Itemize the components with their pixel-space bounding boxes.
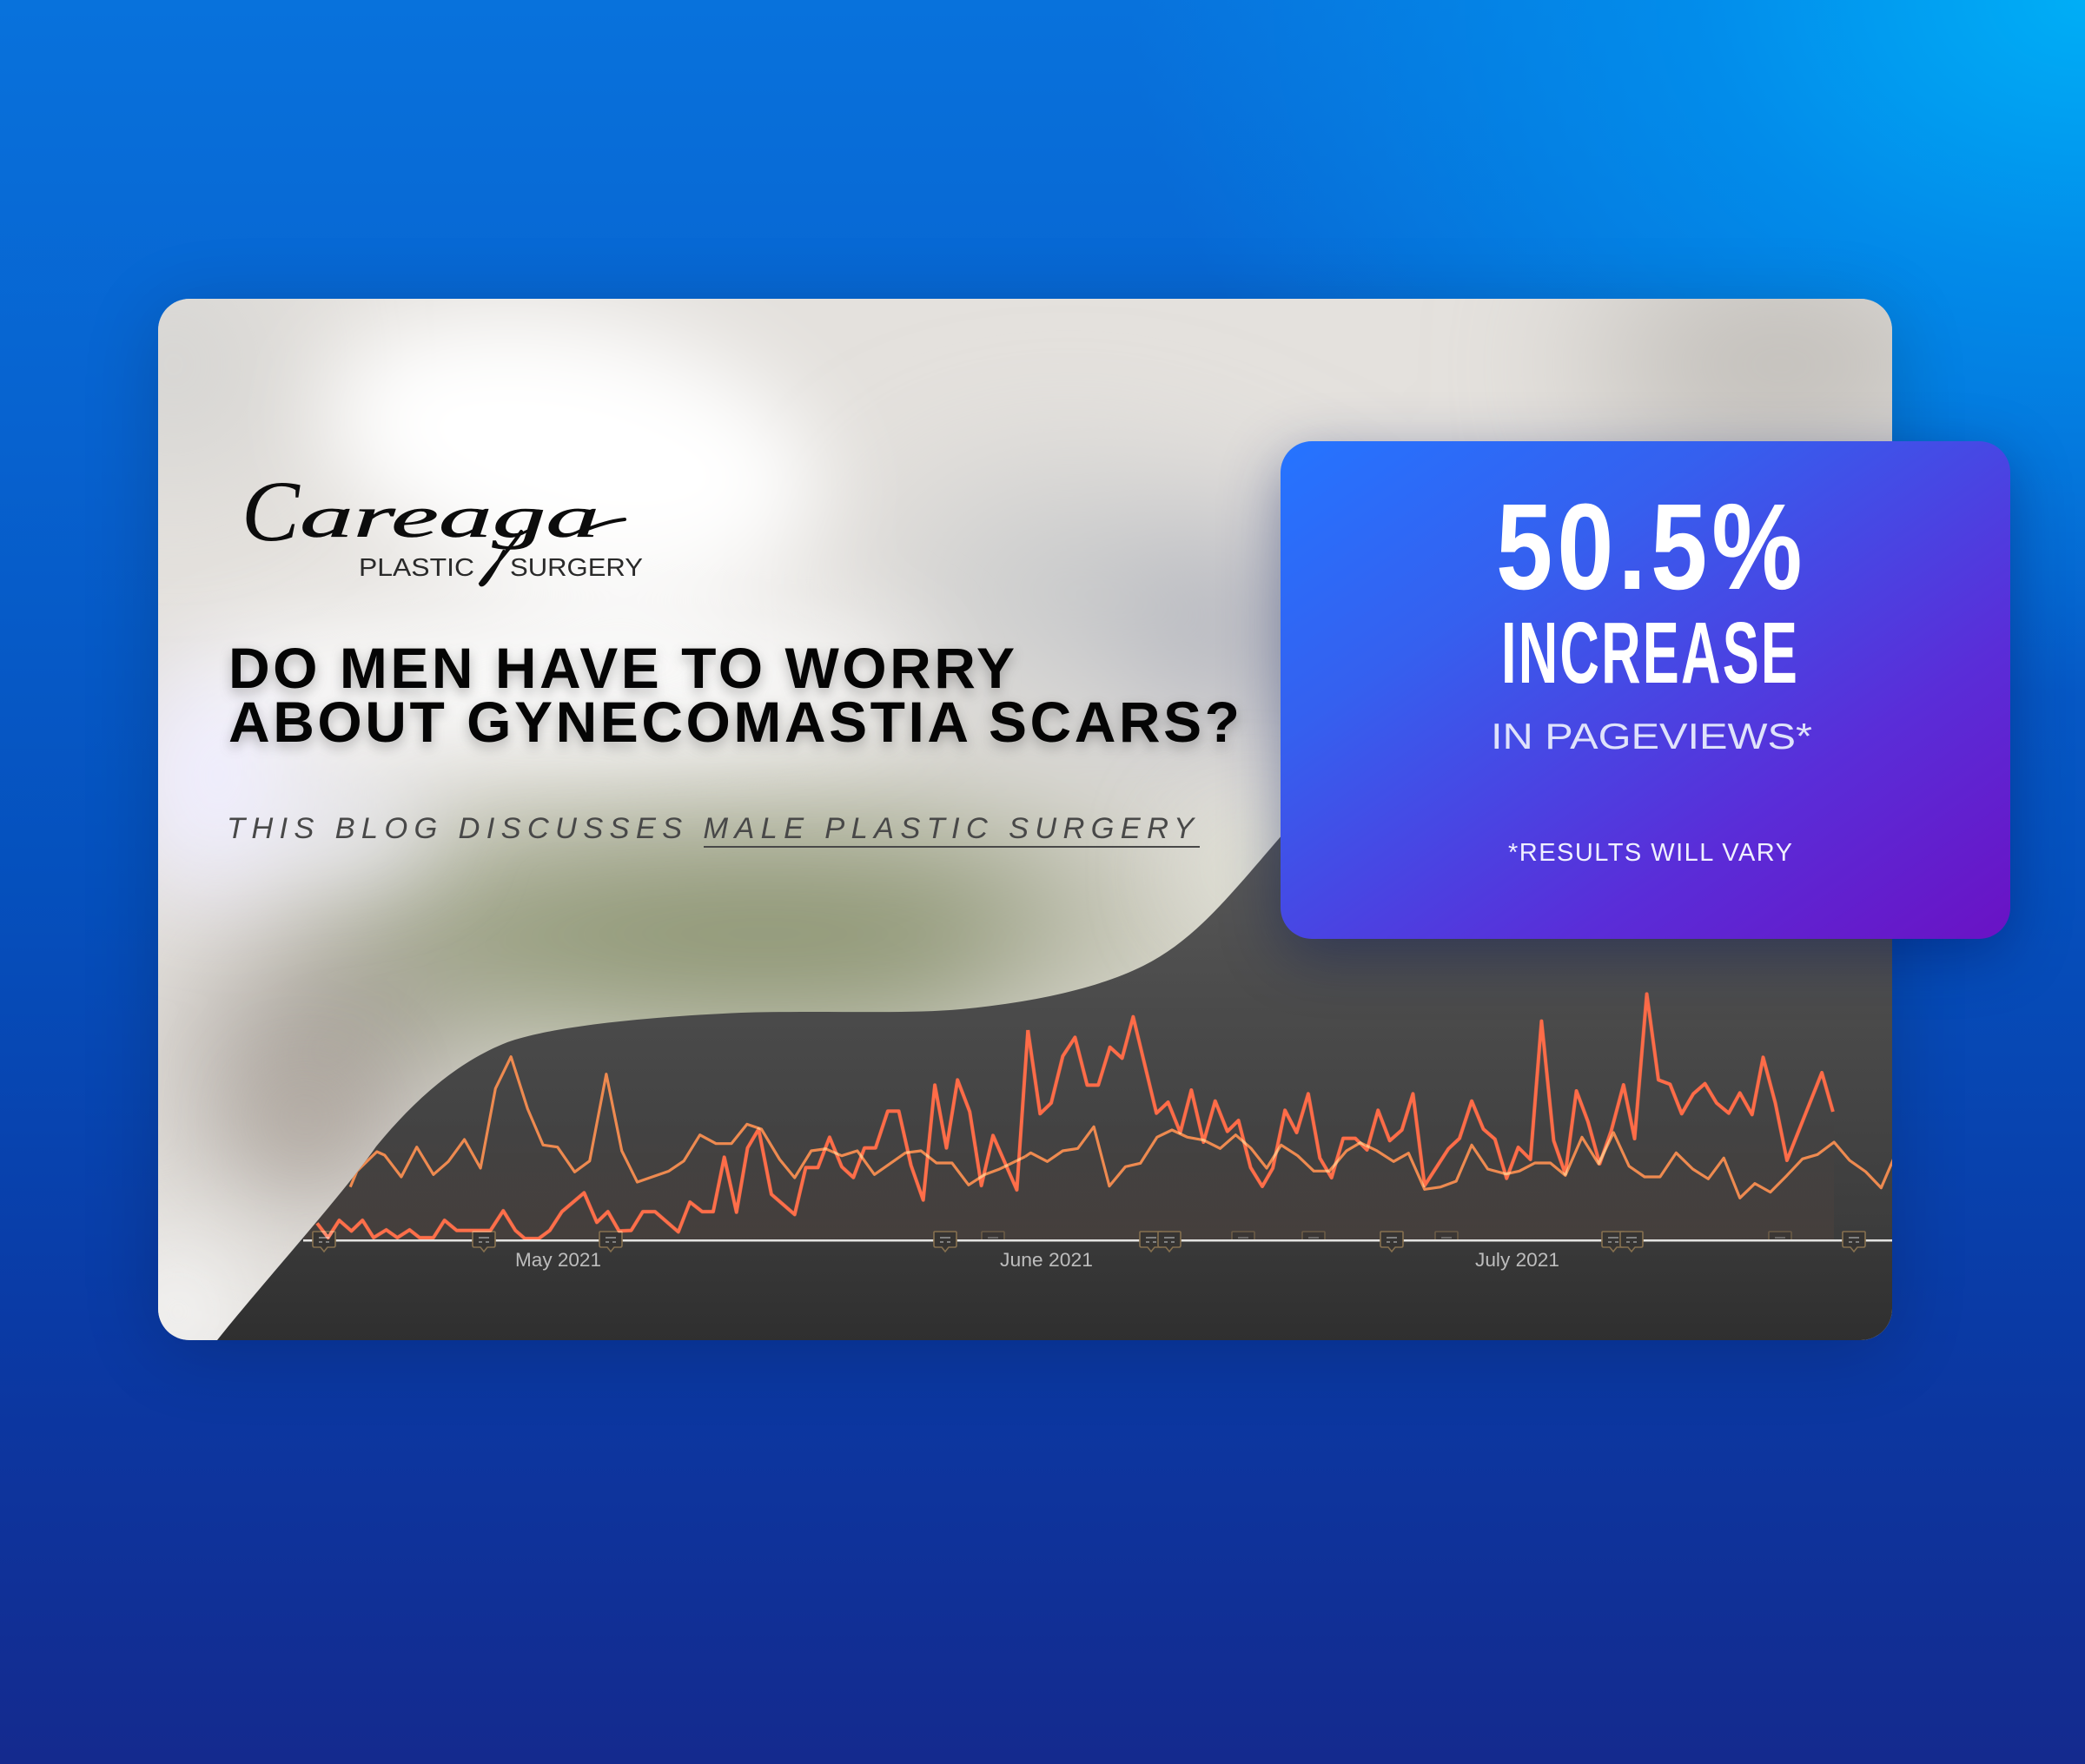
stat label: IN PAGEVIEWS: IN PAGEVIEWS* xyxy=(1491,716,1812,756)
logo script wordmark: C xyxy=(242,463,301,559)
line: current period xyxy=(317,994,1833,1239)
axis label: July 2021: July 2021 xyxy=(1475,1249,1559,1271)
dark chart background xyxy=(217,821,1892,1340)
panel: stat callout xyxy=(1281,441,2010,939)
line: previous period xyxy=(350,1057,1894,1198)
title: DO MEN HAVE TO WORRY xyxy=(228,636,1015,700)
stat label: INCREASE: INCREASE xyxy=(1501,604,1799,702)
logo pen flourish xyxy=(480,519,625,585)
disclaimer: *RESULTS WILL VARY xyxy=(1508,839,1792,867)
line chart xyxy=(303,994,1894,1252)
logo line: PLASTIC: PLASTIC xyxy=(359,554,474,582)
title: ABOUT GYNECOMASTIA SCARS? xyxy=(228,690,1240,754)
baseline axis xyxy=(303,1239,1893,1242)
axis label: June 2021: June 2021 xyxy=(1000,1249,1093,1271)
stat: 50.5%: 50.5% xyxy=(1496,479,1807,615)
title xyxy=(228,636,1240,754)
axis label: May 2021: May 2021 xyxy=(515,1249,601,1271)
infographic canvas xyxy=(128,278,2040,1376)
logo: Careaga Plastic Surgery xyxy=(242,463,643,585)
subtitle: THIS BLOG DISCUSSES MALE PLASTIC SURGERY xyxy=(227,812,1196,845)
comment markers dimmed xyxy=(981,1231,1792,1239)
panel: main card xyxy=(87,261,1972,1381)
logo script letters: areaga xyxy=(300,484,599,550)
comment markers xyxy=(313,1232,1865,1252)
logo line: SURGERY: SURGERY xyxy=(510,554,643,582)
